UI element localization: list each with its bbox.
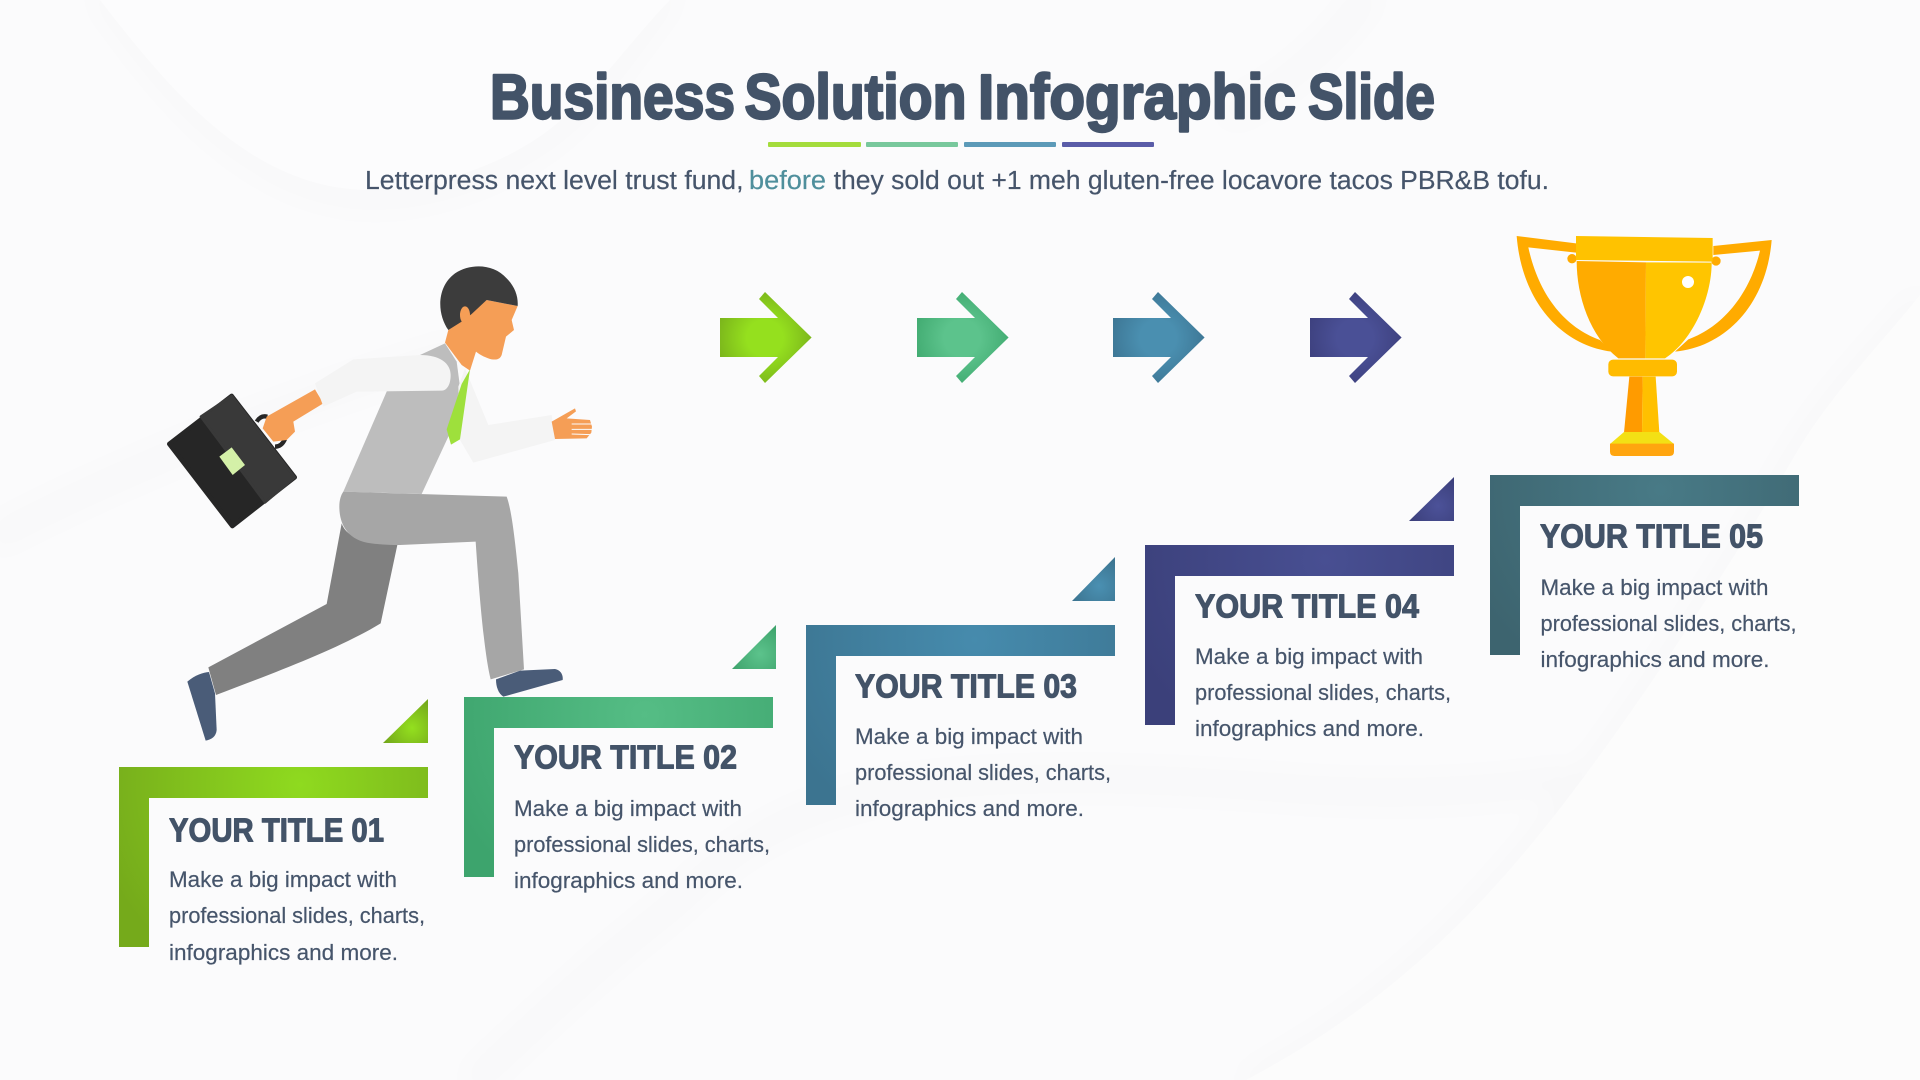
body text: Make a big impact with bbox=[855, 724, 1083, 749]
body text: professional slides, charts, bbox=[514, 832, 770, 857]
bracket bbox=[119, 767, 428, 947]
heading: YOUR TITLE 01 bbox=[169, 812, 384, 848]
tie bbox=[447, 369, 470, 445]
title: Business bbox=[490, 62, 735, 132]
body text: professional slides, charts, bbox=[1195, 680, 1451, 705]
body text: infographics and more. bbox=[855, 796, 1084, 821]
subtitle: before bbox=[749, 167, 826, 195]
body text: infographics and more. bbox=[1195, 716, 1424, 741]
body text bbox=[169, 867, 425, 965]
rear shoe bbox=[187, 672, 217, 741]
arrow 3 bbox=[1113, 292, 1205, 383]
body text bbox=[1195, 644, 1451, 741]
body text: infographics and more. bbox=[169, 940, 398, 965]
bracket bbox=[1145, 545, 1454, 725]
panel: step 05 bbox=[1490, 475, 1799, 672]
head bbox=[440, 266, 518, 371]
body text: Make a big impact with bbox=[1195, 644, 1423, 669]
title: Solution bbox=[744, 62, 966, 132]
panel: step 04 bbox=[1145, 477, 1454, 741]
body text: Make a big impact with bbox=[169, 867, 397, 892]
icon: running businessman bbox=[169, 266, 592, 741]
arrow 4 bbox=[1310, 292, 1402, 383]
rear arm sleeve bbox=[315, 355, 451, 407]
body text: Make a big impact with bbox=[514, 796, 742, 821]
rear hand and forearm bbox=[263, 389, 323, 442]
front hand bbox=[552, 408, 592, 439]
body text bbox=[514, 796, 770, 893]
body text: professional slides, charts, bbox=[855, 760, 1111, 785]
subtitle: they sold out +1 meh gluten-free locavore tacos PBR&B tofu. bbox=[834, 167, 1549, 195]
title: Slide bbox=[1308, 62, 1435, 132]
icon: trophy bbox=[1517, 236, 1772, 456]
body text: infographics and more. bbox=[514, 868, 743, 893]
subtitle bbox=[365, 167, 1549, 195]
front shoe bbox=[496, 669, 563, 697]
heading: YOUR TITLE 02 bbox=[514, 738, 737, 776]
heading: YOUR TITLE 03 bbox=[855, 668, 1077, 704]
body text: professional slides, charts, bbox=[169, 903, 425, 928]
title bbox=[490, 62, 1435, 132]
trophy cup bbox=[1576, 236, 1713, 358]
trophy handles bbox=[1517, 236, 1772, 352]
corner triangle bbox=[1072, 557, 1115, 601]
corner triangle bbox=[1409, 477, 1454, 521]
body text: infographics and more. bbox=[1540, 647, 1770, 672]
arrow 2 bbox=[917, 292, 1009, 383]
heading: YOUR TITLE 04 bbox=[1195, 588, 1420, 624]
panel: step 02 bbox=[464, 625, 776, 893]
corner triangle bbox=[732, 625, 776, 669]
heading: YOUR TITLE 05 bbox=[1540, 518, 1763, 554]
corner triangle bbox=[383, 699, 428, 743]
subtitle: Letterpress next level trust fund, bbox=[365, 167, 744, 195]
title underline bars bbox=[768, 142, 1154, 147]
panel: step 03 bbox=[806, 557, 1115, 821]
bracket bbox=[464, 697, 773, 877]
body text bbox=[1540, 575, 1796, 672]
arrow 1 bbox=[720, 292, 812, 383]
body text: professional slides, charts, bbox=[1540, 611, 1796, 636]
rear leg bbox=[208, 523, 397, 695]
bracket bbox=[1490, 475, 1799, 655]
title: Infographic bbox=[978, 62, 1296, 132]
trophy stem and base bbox=[1608, 360, 1677, 456]
front arm sleeve bbox=[458, 368, 555, 463]
bracket bbox=[806, 625, 1115, 805]
body text bbox=[855, 724, 1111, 821]
panel: step 01 bbox=[119, 699, 428, 965]
body text: Make a big impact with bbox=[1540, 575, 1768, 600]
vest bbox=[343, 343, 460, 494]
front leg and hip bbox=[339, 492, 524, 679]
icon: briefcase bbox=[169, 396, 295, 526]
